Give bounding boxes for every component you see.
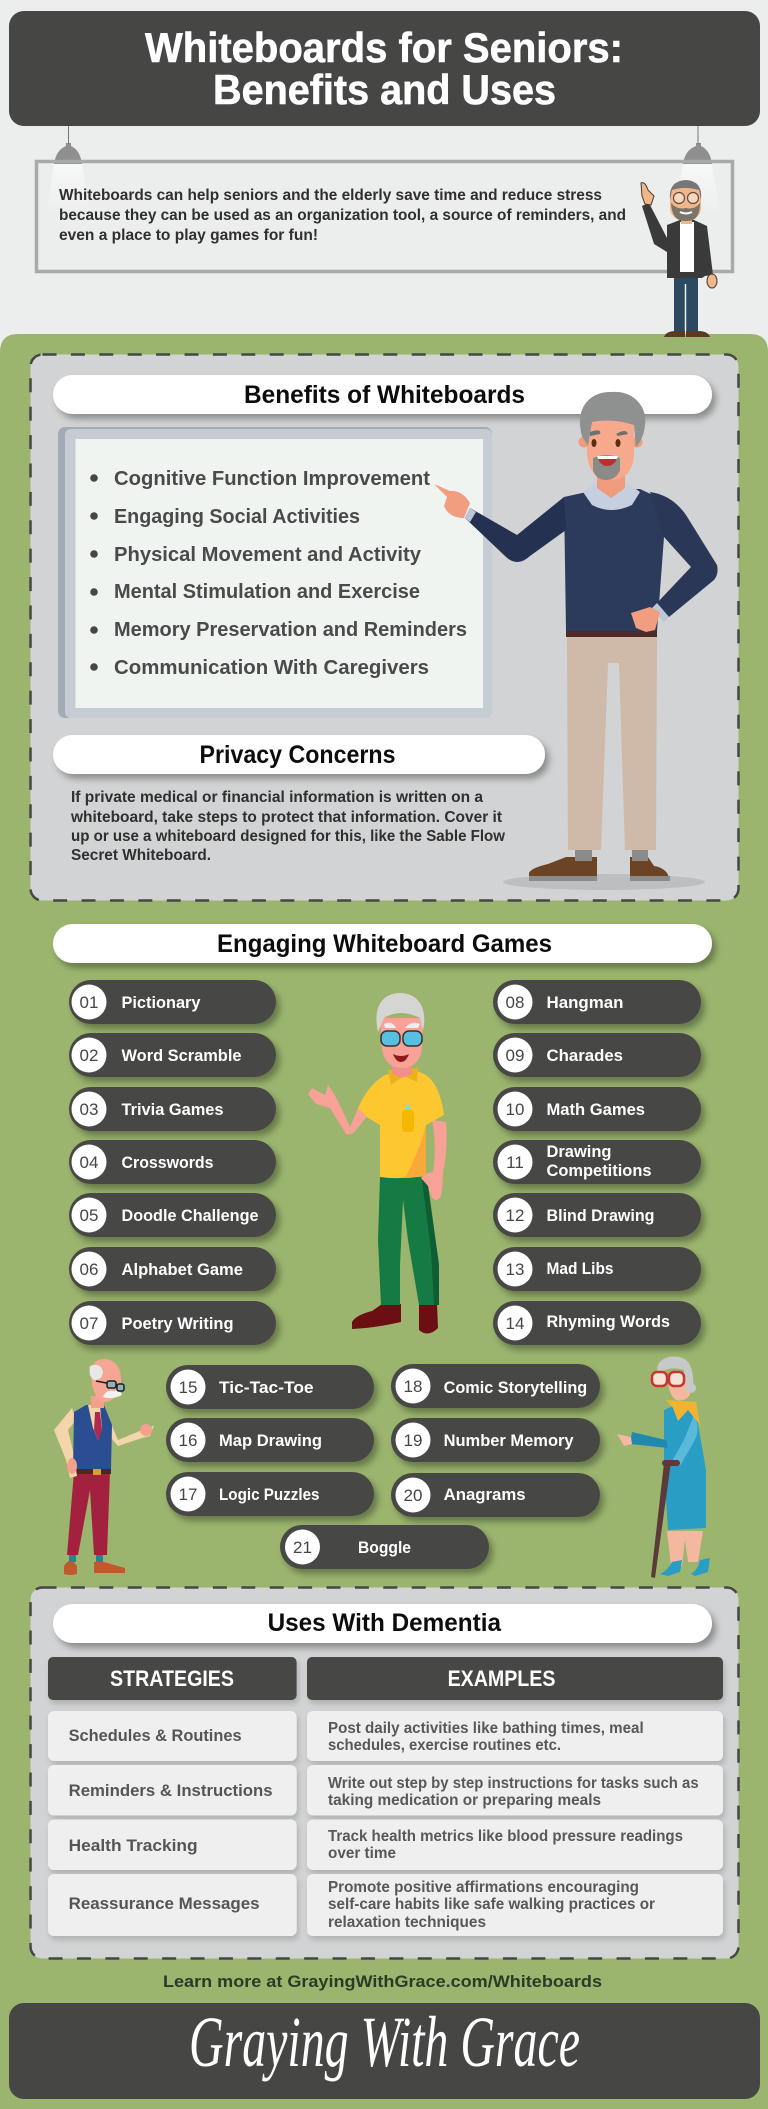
panel: intro board	[36, 162, 732, 272]
game 07: 07	[80, 1314, 98, 1333]
figure: older woman with cane	[617, 1356, 710, 1578]
whiteboard with benefits list: Mental Stimulation and Exercise	[114, 581, 420, 603]
title banner: Whiteboards for Seniors:	[145, 24, 623, 71]
game 01: 01	[80, 993, 98, 1012]
panel: benefits	[30, 354, 738, 900]
table header: strategies: STRATEGIES	[110, 1666, 234, 1691]
game list: left column	[69, 980, 276, 1345]
game 18	[391, 1364, 600, 1408]
game 20	[391, 1473, 600, 1517]
heading: Engaging Whiteboard Games	[53, 924, 712, 963]
game 12: 12	[506, 1206, 524, 1225]
game 12: Blind Drawing	[546, 1206, 654, 1225]
text: privacy paragraph: whiteboard, take steps to protect that information. Cover it	[70, 809, 503, 826]
text: intro paragraph: Whiteboards can help seniors and the elderly save time and reduce stress	[59, 187, 602, 204]
game 12	[493, 1193, 701, 1237]
game list: right column	[493, 980, 701, 1345]
game 14	[493, 1301, 701, 1345]
game 18: 18	[404, 1377, 422, 1396]
game 06: 06	[80, 1260, 98, 1279]
figure: man pointing at whiteboard	[434, 392, 718, 890]
game 01	[69, 980, 276, 1024]
title banner: Benefits and Uses	[213, 66, 556, 113]
whiteboard with benefits list	[58, 427, 492, 718]
game 14: Rhyming Words	[546, 1312, 670, 1331]
text: privacy paragraph: If private medical or financial information is written on a	[71, 789, 483, 806]
table row: health tracking: over time	[328, 1845, 396, 1862]
table row: reminders: taking medication or preparing meals	[328, 1792, 601, 1809]
game 06: Alphabet Game	[122, 1260, 243, 1279]
whiteboard with benefits list: Engaging Social Activities	[114, 506, 360, 528]
game 19	[391, 1418, 600, 1462]
whiteboard with benefits list: Physical Movement and Activity	[114, 544, 422, 566]
panel: uses with dementia	[30, 1588, 738, 1958]
figure: man in yellow shirt	[308, 993, 447, 1334]
game 17	[166, 1472, 374, 1516]
game 16	[166, 1418, 374, 1462]
game 11: Drawing	[546, 1142, 612, 1161]
game 02: Word Scramble	[122, 1046, 242, 1065]
heading: Privacy Concerns: Privacy Concerns	[200, 741, 396, 769]
table row: health tracking: Track health metrics like blood pressure readings	[328, 1828, 683, 1845]
table row: reassurance: relaxation techniques	[328, 1914, 486, 1931]
heading: Benefits of Whiteboards	[53, 375, 712, 414]
game 15: 15	[179, 1378, 197, 1397]
table row: schedules: schedules, exercise routines etc.	[328, 1737, 561, 1754]
table row: health tracking: Health Tracking	[69, 1836, 198, 1855]
table row: schedules	[48, 1711, 723, 1761]
game 03: 03	[80, 1100, 98, 1119]
game 03	[69, 1087, 276, 1131]
game 14: 14	[506, 1314, 524, 1333]
table row: reassurance: Promote positive affirmations encouraging	[328, 1879, 639, 1896]
game 11: Competitions	[546, 1161, 652, 1180]
text: privacy paragraph	[70, 789, 506, 864]
heading: Engaging Whiteboard Games: Engaging Whiteboard Games	[217, 930, 552, 958]
game 04: Crosswords	[122, 1153, 214, 1172]
game 21: Boggle	[358, 1538, 411, 1557]
table row: reminders: Reminders & Instructions	[69, 1781, 273, 1800]
game 15: Tic-Tac-Toe	[219, 1378, 314, 1397]
game 19: 19	[404, 1431, 422, 1450]
text: learn more link: Learn more at GrayingWithGrace.com/Whiteboards	[163, 1972, 602, 1991]
game 07: Poetry Writing	[122, 1314, 234, 1333]
game 08: 08	[506, 993, 524, 1012]
game 04: 04	[80, 1153, 98, 1172]
heading: Benefits of Whiteboards: Benefits of Whiteboards	[244, 381, 525, 409]
table row: reassurance	[48, 1874, 723, 1936]
text: intro paragraph: because they can be used as an organization tool, a source of reminders, and	[59, 207, 626, 224]
table row: health tracking	[48, 1820, 723, 1870]
footer banner: Graying With Grace	[189, 2002, 580, 2082]
game 03: Trivia Games	[122, 1100, 224, 1119]
game 16: Map Drawing	[219, 1431, 322, 1450]
game 06	[69, 1247, 276, 1291]
game 07	[69, 1301, 276, 1345]
game 05: 05	[80, 1206, 98, 1225]
table header: examples	[307, 1657, 723, 1700]
game 17: Logic Puzzles	[219, 1485, 320, 1504]
game 11	[493, 1140, 701, 1184]
table row: reassurance: self-care habits like safe walking practices or	[328, 1896, 655, 1913]
game 04	[69, 1140, 276, 1184]
game 05: Doodle Challenge	[122, 1206, 258, 1225]
table row: reassurance: Reassurance Messages	[69, 1894, 260, 1913]
game 18: Comic Storytelling	[444, 1378, 587, 1397]
game 20: Anagrams	[444, 1485, 526, 1504]
game 02	[69, 1033, 276, 1077]
footer banner	[9, 2002, 760, 2099]
text: intro paragraph: even a place to play games for fun!	[59, 227, 318, 244]
game 13	[493, 1247, 701, 1291]
table row: schedules: Schedules & Routines	[69, 1726, 242, 1745]
game 01: Pictionary	[122, 993, 201, 1012]
game 10	[493, 1087, 701, 1131]
figure: presenter with raised hand	[641, 180, 717, 337]
figure: older man in blue vest	[54, 1359, 154, 1575]
table row: reminders: Write out step by step instructions for tasks such as	[328, 1775, 699, 1792]
heading: Uses With Dementia	[53, 1604, 712, 1643]
game 21: 21	[293, 1538, 312, 1557]
whiteboard with benefits list: Memory Preservation and Reminders	[114, 619, 467, 641]
heading: Uses With Dementia: Uses With Dementia	[268, 1609, 502, 1637]
text: intro paragraph	[59, 187, 626, 244]
game 13: 13	[506, 1260, 524, 1279]
game 13: Mad Libs	[546, 1259, 614, 1278]
game 19: Number Memory	[444, 1431, 574, 1450]
game 11: 11	[506, 1153, 524, 1172]
game 09: 09	[506, 1046, 524, 1065]
game 09: Charades	[546, 1046, 623, 1065]
game 20: 20	[404, 1486, 422, 1505]
game 21	[280, 1525, 489, 1569]
game 05	[69, 1193, 276, 1237]
table row: reminders	[48, 1765, 723, 1816]
table header: strategies	[48, 1657, 297, 1700]
game 10: 10	[506, 1100, 524, 1119]
text: privacy paragraph: Secret Whiteboard.	[71, 847, 211, 864]
text: privacy paragraph: up or use a whiteboard designed for this, like the Sable Flow	[71, 828, 506, 845]
title banner	[9, 11, 760, 126]
game 15	[166, 1365, 374, 1409]
game 09	[493, 1033, 701, 1077]
table row: schedules: Post daily activities like bathing times, meal	[328, 1720, 644, 1737]
game 16: 16	[179, 1431, 197, 1450]
table header: examples: EXAMPLES	[448, 1666, 555, 1691]
game 08: Hangman	[546, 993, 624, 1012]
game 02: 02	[80, 1046, 98, 1065]
whiteboard with benefits list: Communication With Caregivers	[114, 657, 429, 679]
heading: Privacy Concerns	[53, 735, 545, 774]
whiteboard with benefits list: Cognitive Function Improvement	[114, 468, 430, 490]
game 08	[493, 980, 701, 1024]
game list: bottom rows	[166, 1364, 600, 1569]
icon: hanging lamps	[46, 126, 720, 215]
game 17: 17	[179, 1485, 197, 1504]
game 10: Math Games	[546, 1100, 645, 1119]
